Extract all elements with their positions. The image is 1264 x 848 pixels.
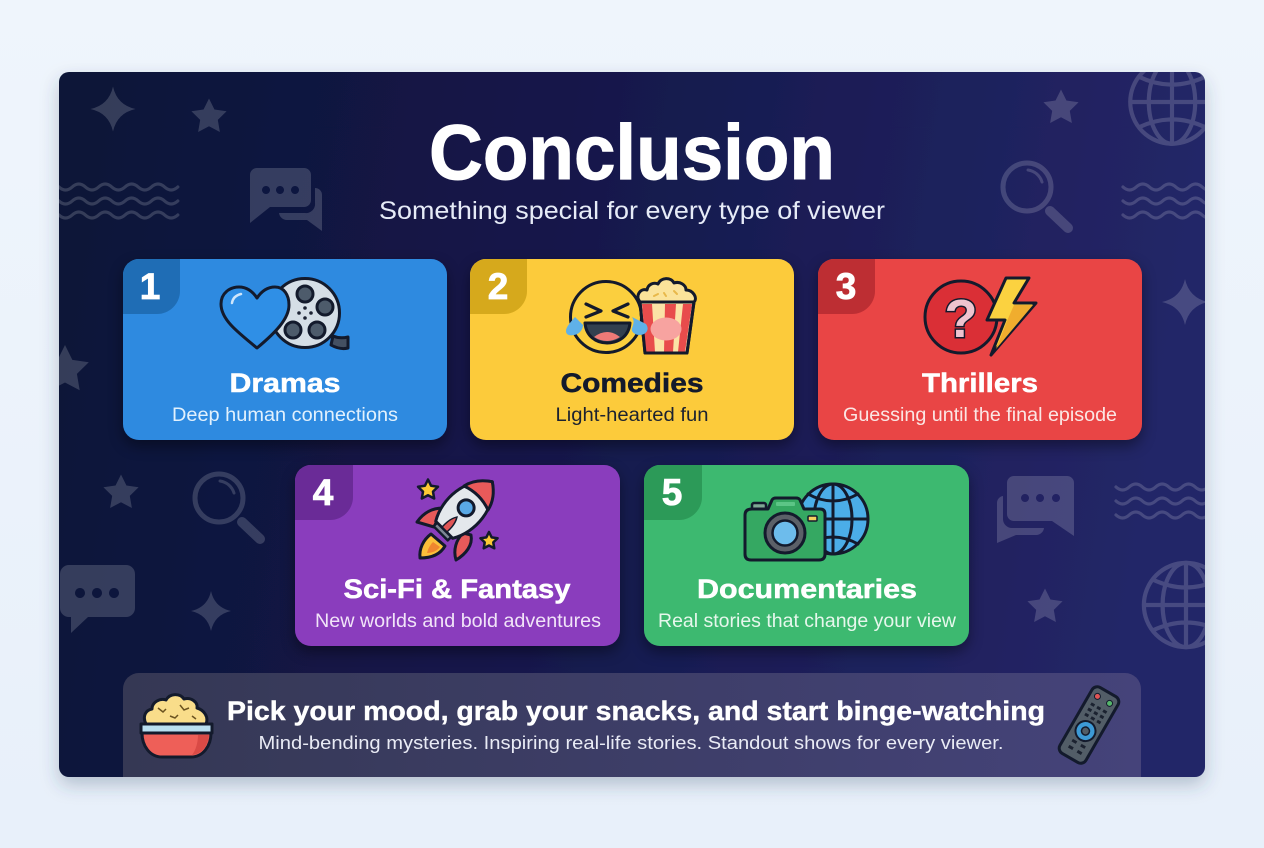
description: Real stories that change your view [658, 611, 956, 632]
badge 4: 4 [313, 472, 334, 513]
heading: Sci-Fi & Fantasy [344, 574, 570, 604]
card 3: thrillers [818, 259, 1142, 440]
badge 2: 2 [488, 266, 508, 307]
headline: Pick your mood, grab your snacks, and start binge-watching [227, 696, 1045, 726]
icon: heart and film reel [221, 278, 348, 349]
badge 1 [123, 259, 180, 314]
icon: rocket and stars [417, 468, 506, 560]
badge 1: 1 [140, 266, 160, 307]
icon: popcorn bowl [141, 695, 212, 757]
supporting text: Mind-bending mysteries. Inspiring real-life stories. Standout shows for every viewer. [258, 733, 1004, 753]
badge 5 [644, 465, 702, 520]
icon: laughing face and popcorn [566, 279, 695, 353]
icon: camera and globe [745, 484, 868, 560]
badge 2 [470, 259, 527, 314]
heading: Thrillers [922, 368, 1038, 398]
heading: Documentaries [697, 574, 917, 604]
description: Guessing until the final episode [843, 405, 1117, 426]
bottom call-to-action bar [123, 673, 1141, 777]
background pattern icons [41, 60, 1242, 647]
description: New worlds and bold adventures [315, 611, 601, 632]
heading: Dramas [230, 368, 340, 398]
card 5: documentaries [644, 465, 969, 646]
card 4: sci-fi and fantasy [295, 465, 620, 646]
description: Deep human connections [172, 405, 398, 426]
description: Light-hearted fun [556, 405, 708, 426]
card 2: comedies [470, 259, 794, 440]
icon: question mark and lightning [925, 278, 1036, 355]
card 1: dramas [123, 259, 447, 440]
badge 4 [295, 465, 353, 520]
subtitle: Something special for every type of viewer [379, 197, 885, 225]
badge 3: 3 [836, 266, 856, 307]
heading: Comedies [560, 368, 704, 398]
icon: tv remote [1057, 685, 1121, 765]
badge 3 [818, 259, 875, 314]
title: Conclusion [429, 108, 835, 196]
icon: question mark and lightning: ? [944, 289, 978, 349]
badge 5: 5 [662, 472, 682, 513]
